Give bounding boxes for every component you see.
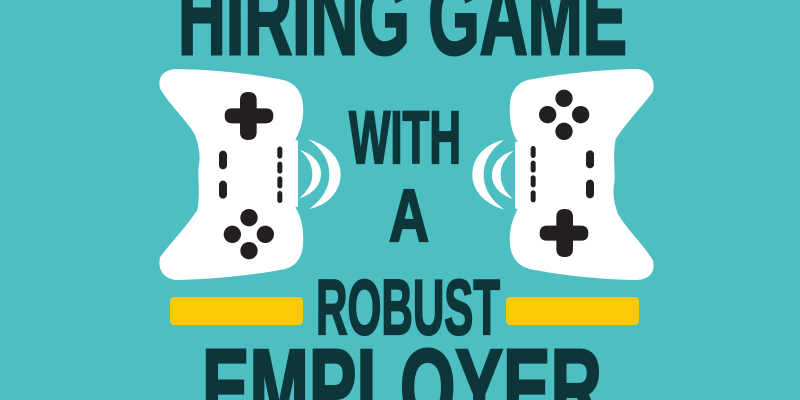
text: robust: ROBUST: [316, 263, 500, 351]
text: with: WITH: [349, 96, 461, 179]
icon: left game controller: [159, 69, 341, 280]
left yellow bar: [170, 297, 303, 325]
right yellow bar: [506, 297, 639, 325]
infographic canvas: [159, 0, 654, 400]
icon: right game controller: [472, 69, 654, 280]
text: a: A: [389, 174, 429, 257]
